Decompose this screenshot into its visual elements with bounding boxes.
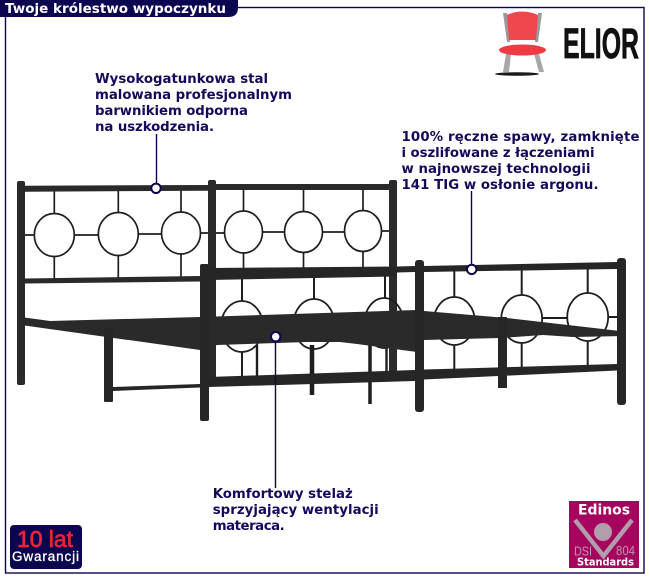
bed illustration	[17, 180, 626, 421]
callout: steel: malowana profesjonalnym	[95, 88, 292, 103]
badge: Edinos standards: DSI	[574, 544, 592, 558]
badge: Edinos standards: 804	[616, 544, 635, 558]
back headboard	[17, 180, 397, 385]
callout: steel: Wysokogatunkowa stal	[95, 72, 268, 87]
badge: Edinos standards: Standards	[577, 556, 634, 568]
title banner: Twoje królestwo wypoczynku	[5, 1, 226, 17]
mattress frame	[21, 310, 626, 352]
callout: steel: barwnikiem odporna	[95, 104, 248, 119]
badge: Edinos standards	[569, 501, 639, 568]
callout: welds: w najnowszej technologii	[402, 162, 590, 177]
callout: steel	[95, 72, 292, 193]
front footboard circles	[221, 268, 618, 404]
callout: welds: 100% ręczne spawy, zamknięte	[402, 130, 640, 145]
badge: Edinos standards: Edinos	[578, 502, 630, 518]
badge: 10 years warranty: 10 lat	[17, 526, 74, 552]
callout: welds: i oszlifowane z łączeniami	[402, 146, 594, 161]
callout: welds: 141 TIG w osłonie argonu.	[402, 178, 598, 193]
callout: slats: sprzyjający wentylacji	[213, 503, 379, 518]
badge: 10 years warranty: Gwarancji	[12, 549, 79, 564]
icon: chair	[495, 12, 546, 76]
front footboard	[104, 258, 626, 421]
badge: 10 years warranty	[10, 525, 82, 569]
callout: steel: na uszkodzenia.	[95, 120, 214, 135]
callout: slats	[213, 332, 379, 534]
logo: Elior chair	[495, 12, 639, 76]
callout: slats: Komfortowy stelaż	[213, 487, 353, 502]
callout: welds	[402, 130, 640, 274]
callout: slats: materaca.	[213, 519, 285, 534]
